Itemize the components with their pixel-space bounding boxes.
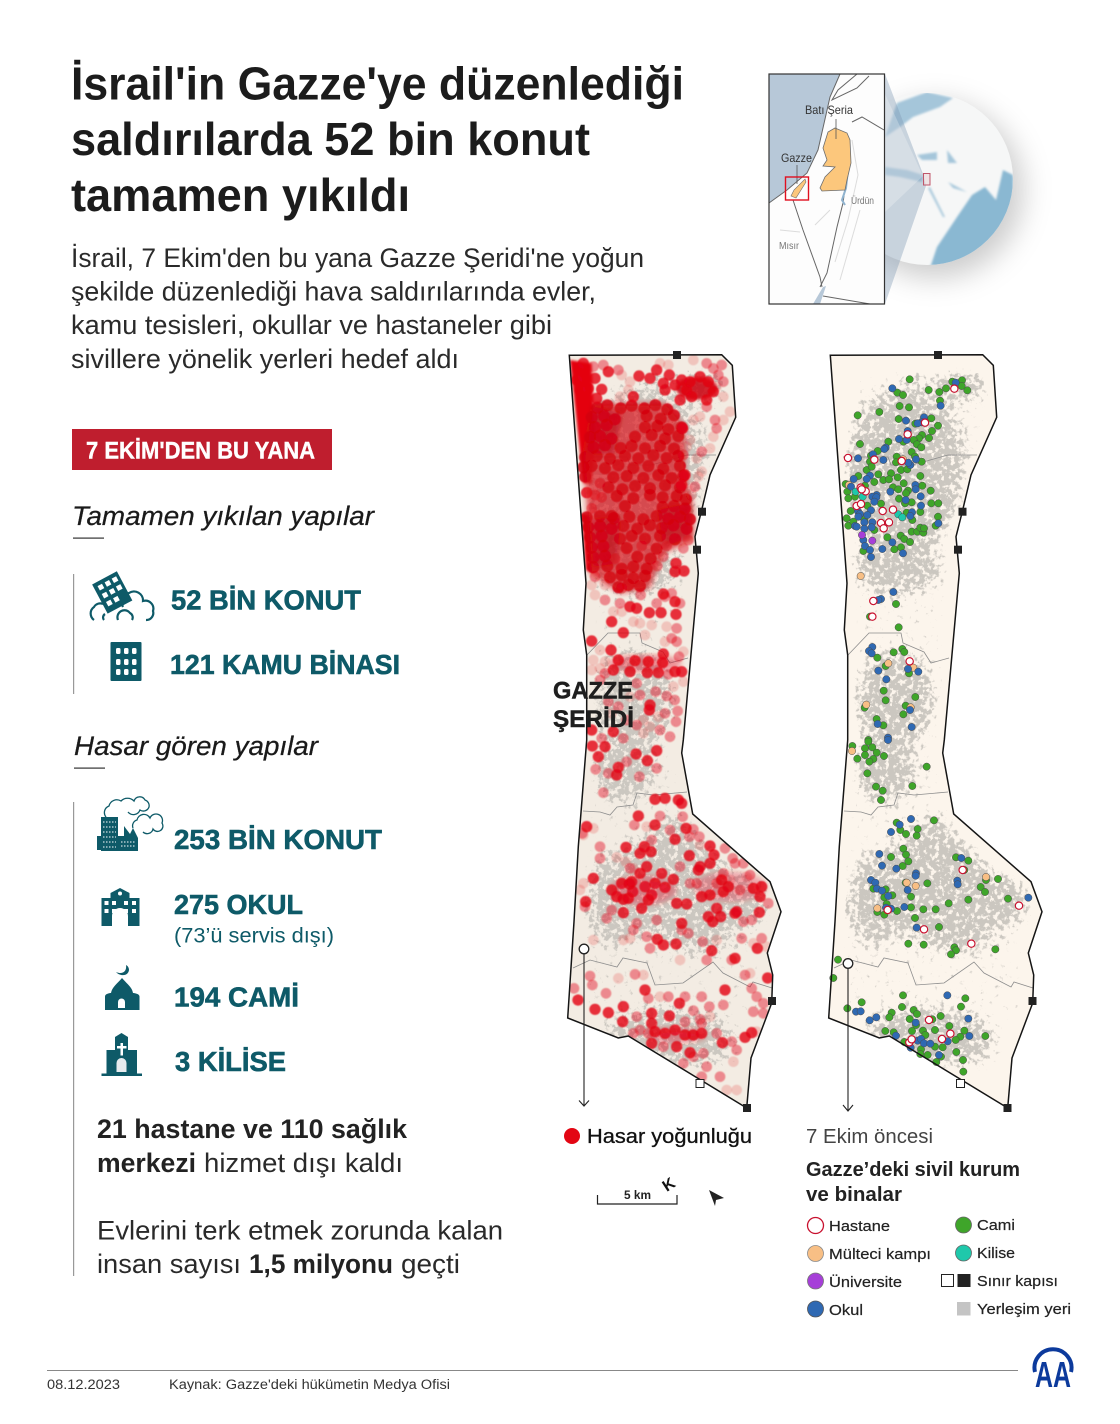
inset map: Gazze [781, 151, 812, 165]
legend heading: ve binalar [806, 1184, 902, 1206]
note: hospitals out of service: 21 hastane ve 110 sağlık [97, 1114, 408, 1144]
scale bar [598, 1188, 677, 1204]
pointer arrow [843, 959, 853, 1111]
icon: mosque [105, 965, 140, 1010]
275 schools: (73’ü servis dışı) [174, 924, 334, 948]
West Bank [820, 128, 851, 191]
label: Gazze Şeridi [553, 678, 634, 733]
inset map: Ürdün [851, 195, 874, 207]
label: Gazze Şeridi: GAZZE [553, 678, 633, 704]
north marker: K [660, 1175, 679, 1195]
inset map [769, 74, 884, 304]
Gaza strip [791, 179, 806, 198]
icon: damaged buildings [97, 797, 163, 851]
section tag: 7 Ekim'den bu yana: 7 EKİM'DEN BU YANA [86, 438, 315, 464]
north marker [660, 1175, 724, 1206]
legend: institutions: Sınır kapısı [977, 1273, 1058, 1290]
logo: AA: AA [1035, 1354, 1071, 1395]
note: displaced people [97, 1216, 503, 1279]
note: displaced people: 1,5 milyonu [249, 1249, 393, 1279]
icon: collapsing building [91, 571, 153, 620]
panel: damaged structures: 253 BİN KONUT [174, 824, 382, 855]
note: hospitals out of service [97, 1114, 408, 1178]
legend: damage density: Hasar yoğunluğu [587, 1126, 752, 1148]
panel: damaged structures: 3 KİLİSE [175, 1046, 286, 1077]
intro text: kamu tesisleri, okullar ve hastaneler gibi [71, 310, 552, 340]
note: hospitals out of service: merkezi [97, 1148, 196, 1178]
legend: institutions [808, 1217, 1071, 1319]
note: displaced people: geçti [401, 1249, 460, 1279]
footer: 08.12.2023 [47, 1377, 120, 1392]
note: displaced people: insan sayısı [97, 1249, 241, 1279]
panel: destroyed structures [73, 571, 400, 694]
map: civil institutions [829, 351, 1042, 1112]
pointer arrow [579, 944, 589, 1106]
logo: AA [1034, 1349, 1072, 1395]
icon: public building [110, 642, 142, 681]
footer [47, 1370, 1018, 1392]
heading: damaged structures: Hasar gören yapılar [74, 731, 319, 761]
intro text: İsrail, 7 Ekim'den bu yana Gazze Şeridi'ne yoğun [71, 242, 644, 273]
label: Gazze Şeridi: ŞERİDİ [553, 706, 634, 733]
legend heading: Gazze’deki sivil kurum [806, 1159, 1020, 1181]
panel: damaged structures [73, 797, 503, 1279]
legend: institutions: Cami [977, 1217, 1015, 1234]
275 schools [174, 889, 334, 948]
scale bar: 5 km [624, 1188, 651, 1202]
panel: destroyed structures: 52 BİN KONUT [171, 584, 361, 616]
icon: school [102, 888, 140, 926]
legend: institutions: Yerleşim yeri [977, 1301, 1071, 1318]
legend heading: 7 Ekim öncesi [806, 1126, 933, 1148]
heading: destroyed structures: Tamamen yıkılan yapılar [72, 501, 375, 531]
note: displaced people: Evlerini terk etmek zorunda kalan [97, 1216, 503, 1246]
map markers: south [830, 736, 1032, 1075]
intro text: sivillere yönelik yerleri hedef aldı [71, 344, 459, 374]
title: İsrail'in Gazze'ye düzenlediği [71, 58, 684, 110]
legend: institutions: Kilise [977, 1245, 1015, 1262]
title: tamamen yıkıldı [71, 169, 410, 221]
inset map: Mısır [779, 241, 800, 252]
map markers: north [842, 376, 971, 744]
red density: north [570, 355, 735, 744]
intro text: şekilde düzenlediği hava saldırılarında evler, [71, 276, 596, 306]
title: saldırılarda 52 bin konut [71, 113, 590, 165]
panel: destroyed structures: 121 KAMU BİNASI [170, 649, 400, 680]
note: hospitals out of service: hizmet dışı kaldı [204, 1148, 403, 1178]
footer: Kaynak: Gazze'deki hükümetin Medya Ofisi [169, 1377, 450, 1392]
legend heading [806, 1126, 1020, 1206]
globe [885, 74, 1035, 304]
legend: institutions: Hastane [829, 1218, 890, 1235]
section tag: 7 Ekim'den bu yana [72, 429, 332, 470]
map: damage density [553, 351, 781, 1112]
intro text [71, 242, 644, 374]
locator map with globe [769, 74, 1023, 304]
inset map: Batı Şeria [805, 103, 853, 117]
legend: institutions: Üniversite [829, 1273, 902, 1291]
275 schools: 275 OKUL [174, 889, 303, 920]
title [71, 58, 684, 221]
panel: damaged structures: 194 CAMİ [174, 982, 299, 1012]
icon: church [102, 1033, 142, 1076]
legend: institutions: Mülteci kampı [829, 1246, 931, 1263]
red density: south [569, 740, 774, 1095]
legend: institutions: Okul [829, 1302, 863, 1319]
